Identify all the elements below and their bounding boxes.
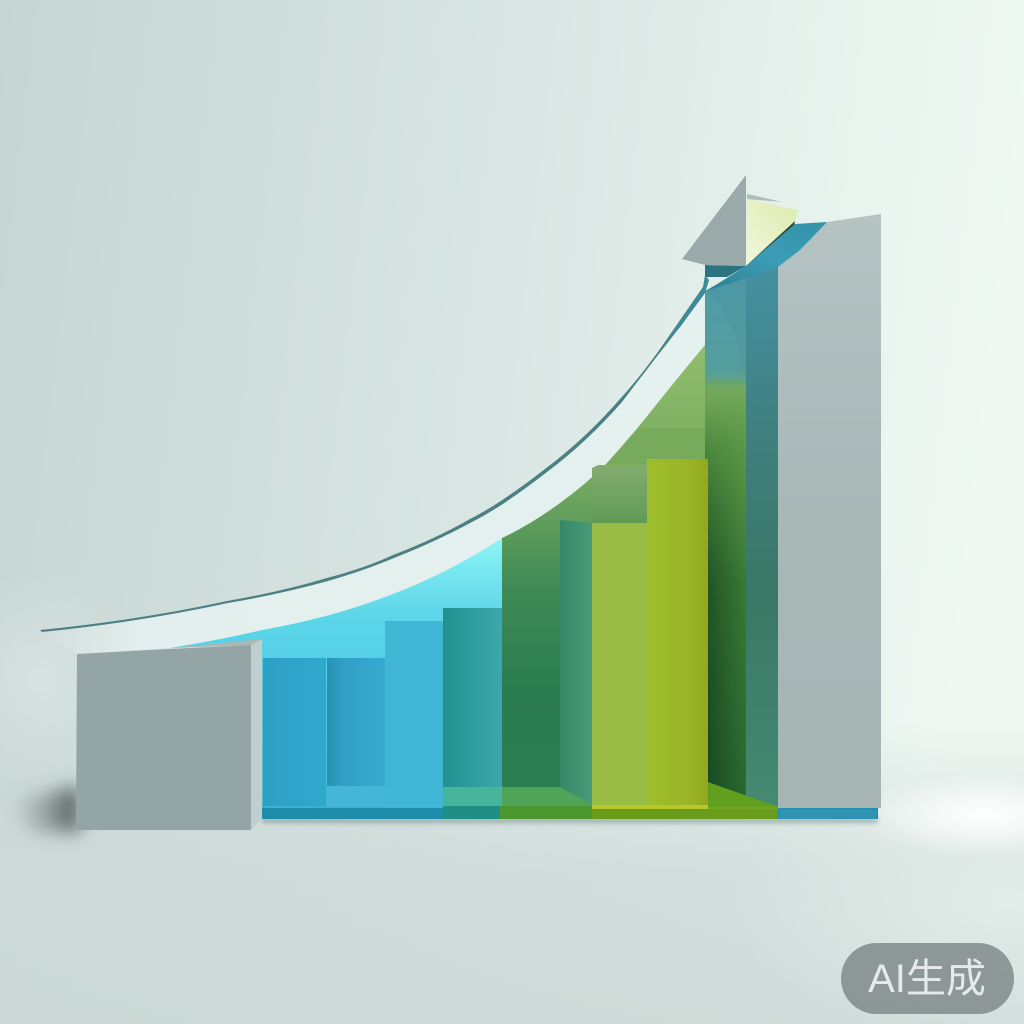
area under curve: blue section [170,538,502,806]
dark underside [705,265,746,277]
tall grey column [778,214,881,808]
bar 6 [592,523,647,805]
blue wing [706,222,827,291]
green bars [560,459,708,805]
bar 3 [385,621,443,807]
ribbon tail [660,275,709,350]
platform shadow [262,818,878,823]
area under curve: green section [502,345,705,806]
blue bars [263,608,502,807]
watermark badge [841,943,1014,1014]
front cube [76,639,262,830]
watermark badge: AI生成 [868,957,986,1001]
dark green teal column [705,267,778,807]
bar 1 [263,658,326,806]
arrowhead [660,175,827,350]
grey fin [682,175,746,266]
light band under trend line [40,290,705,654]
bar 5 side [560,520,592,804]
stepped back panels [592,428,705,523]
paper fin [747,194,783,202]
base platform [262,782,878,819]
trend line [40,287,705,632]
cube shadow [10,786,80,832]
bar 4 [443,608,502,787]
bar 2 [327,658,385,786]
bar 7 [647,459,708,805]
